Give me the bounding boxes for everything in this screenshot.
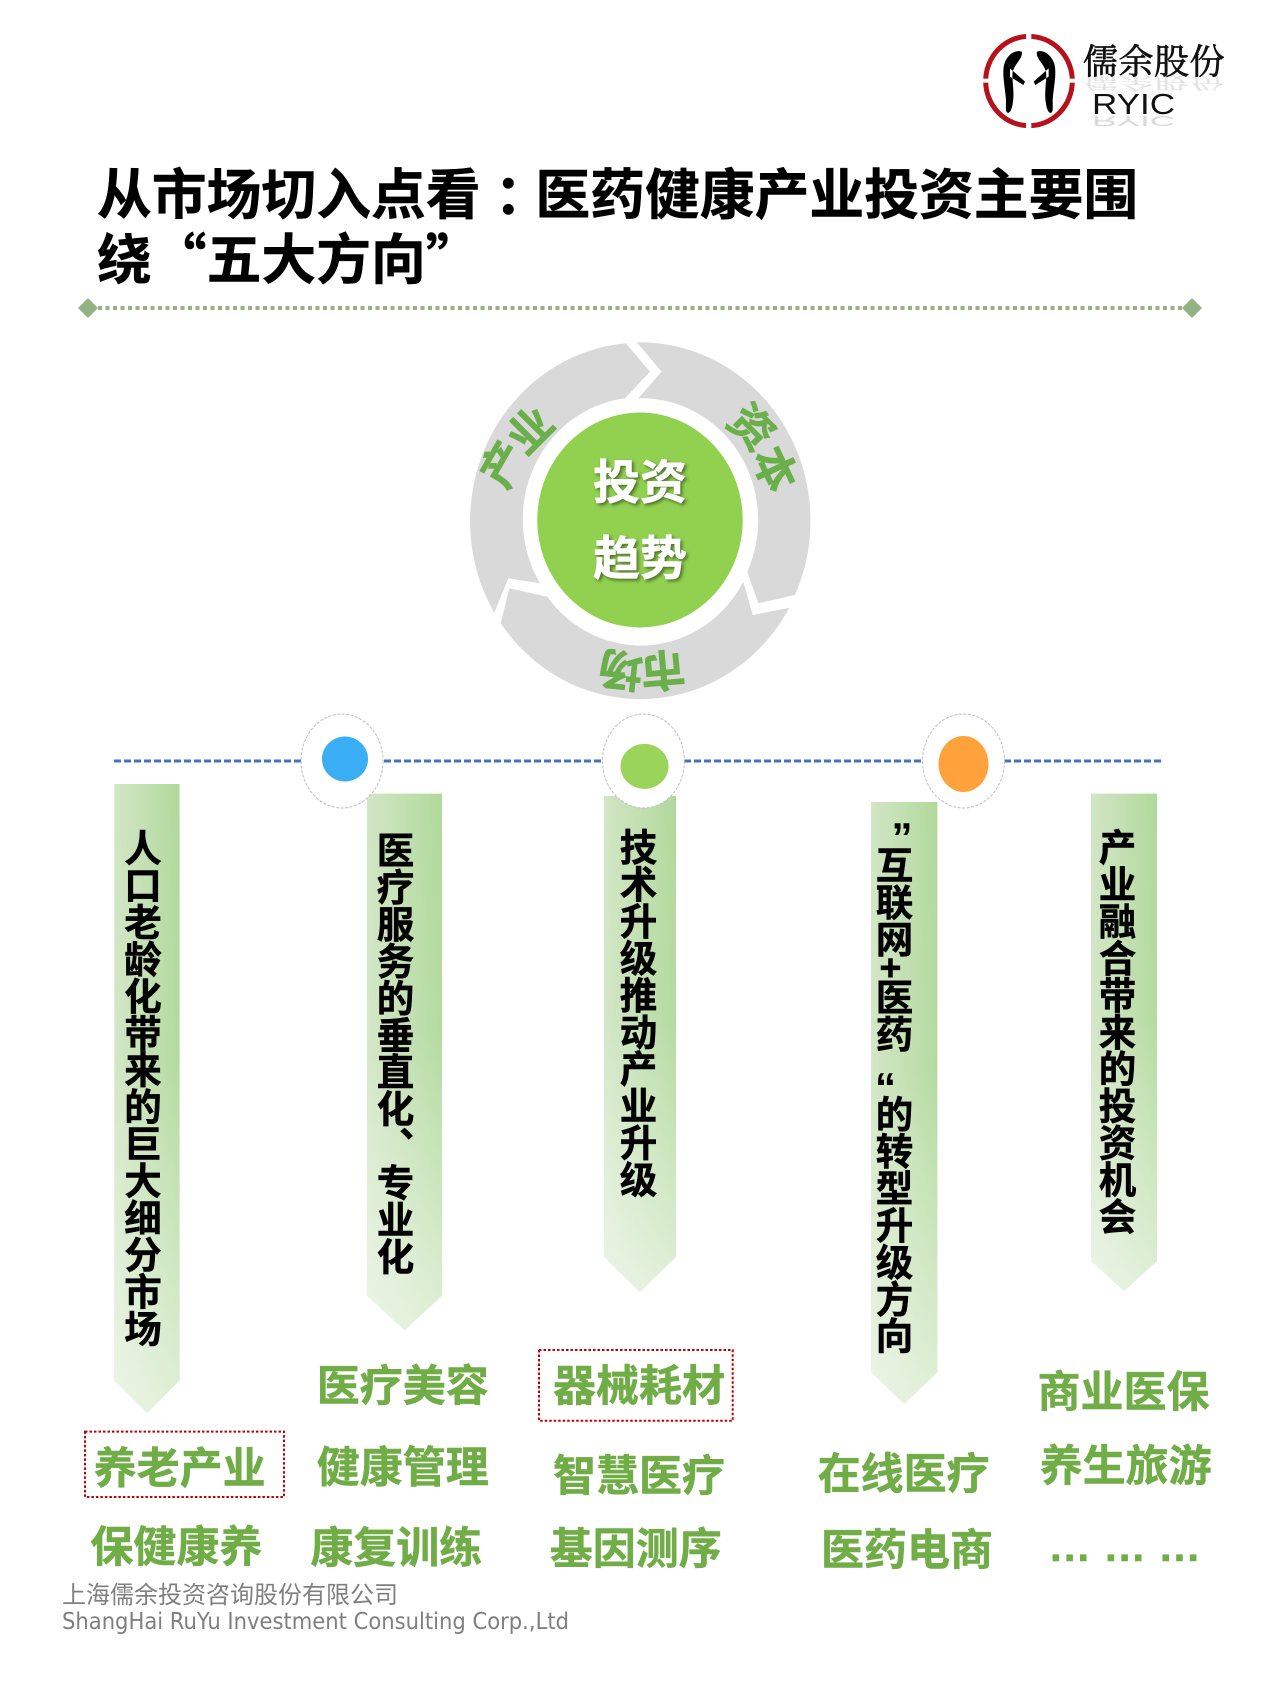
column 2 labels: 康复训练 — [310, 1525, 482, 1573]
banner 4 quote marks: “ — [875, 1064, 896, 1111]
ring label: industry: 业 — [498, 398, 564, 464]
icon: company logo: RYIC — [1092, 89, 1175, 121]
footer: ShangHai RuYu Investment Consulting Corp.,Ltd — [62, 1609, 569, 1635]
column 1 labels: 养老产业 — [94, 1446, 266, 1494]
icon: company logo: 儒余股份 — [1083, 35, 1225, 85]
banner text 2: 医疗服务的垂直化、专业化 — [371, 831, 413, 1274]
column 1 labels: 保健康养 — [90, 1524, 262, 1572]
banner text 3: 技术升级推动产业升级 — [614, 828, 656, 1198]
highlight box: devices — [539, 1350, 733, 1421]
icon: company logo: RYIC — [1092, 113, 1175, 129]
banner text 4, lower part: 的转型升级方向 — [870, 1095, 912, 1354]
center text: 趋势 — [593, 532, 687, 585]
column 4 labels: 在线医疗 — [818, 1451, 990, 1499]
column 3 labels: 智慧医疗 — [553, 1453, 725, 1501]
footer — [62, 1582, 569, 1635]
highlight box: elderly care — [85, 1432, 284, 1497]
ring label: market — [597, 642, 687, 695]
column 4 labels: 医药电商 — [821, 1527, 993, 1575]
arrow segment: market — [501, 582, 789, 699]
ring label: market: 市 — [639, 642, 687, 695]
divider with diamonds — [78, 298, 1202, 318]
footer: 上海儒余投资咨询股份有限公司 — [62, 1582, 398, 1609]
ring label: industry — [472, 398, 564, 496]
ring label: industry: 产 — [472, 433, 537, 496]
center circle — [537, 412, 743, 628]
column 5 labels: 养生旅游 — [1040, 1443, 1212, 1491]
timeline node: orange — [922, 714, 1004, 808]
title — [97, 150, 1138, 295]
banner 1 — [114, 784, 180, 1413]
timeline node: green — [602, 714, 684, 808]
column 5 labels: 商业医保 — [1038, 1369, 1210, 1417]
banner text 5: 产业融合带来的投资机会 — [1093, 828, 1135, 1234]
banner 4 — [871, 802, 937, 1404]
banner text 1: 人口老龄化带来的巨大细分市场 — [118, 829, 160, 1346]
column 2 labels: 健康管理 — [317, 1444, 489, 1492]
column 5 labels — [1038, 1369, 1212, 1571]
column 5 labels: … … … — [1048, 1523, 1201, 1571]
ring label: market: 场 — [597, 642, 646, 695]
arrow segment: industry — [470, 343, 650, 613]
title: 绕“五大方向” — [97, 215, 481, 295]
cycle diagram: investment trends — [470, 342, 810, 699]
column 3 labels: 基因测序 — [550, 1526, 722, 1574]
timeline dashed line — [114, 760, 1162, 762]
banner 3 — [604, 796, 676, 1292]
column 4 labels — [818, 1451, 993, 1575]
column 2 labels: 医疗美容 — [317, 1363, 489, 1411]
icon: company logo: 儒余股份 — [1083, 71, 1225, 96]
banner text 4, upper part: 互联网+医药 — [870, 846, 912, 1052]
column 3 labels — [550, 1363, 725, 1574]
icon: company logo — [981, 33, 1225, 129]
arrow segment: capital — [637, 342, 810, 603]
column 2 labels — [310, 1363, 489, 1573]
banner 4 quote marks — [875, 814, 912, 1111]
ring label: capital: 资 — [718, 395, 784, 461]
column 1 labels — [90, 1446, 266, 1572]
banner 2 — [367, 794, 442, 1330]
title: 从市场切入点看 ：医药健康产业投资主要围 — [97, 150, 1138, 230]
ring label: capital — [718, 395, 805, 500]
center text — [593, 456, 687, 585]
banner 5 — [1091, 794, 1157, 1291]
timeline node: blue — [301, 714, 383, 808]
center text: 投资 — [593, 456, 687, 509]
banner 4 quote marks: ” — [892, 814, 912, 861]
column 3 labels: 器械耗材 — [553, 1363, 725, 1411]
ring label: capital: 本 — [742, 439, 805, 500]
